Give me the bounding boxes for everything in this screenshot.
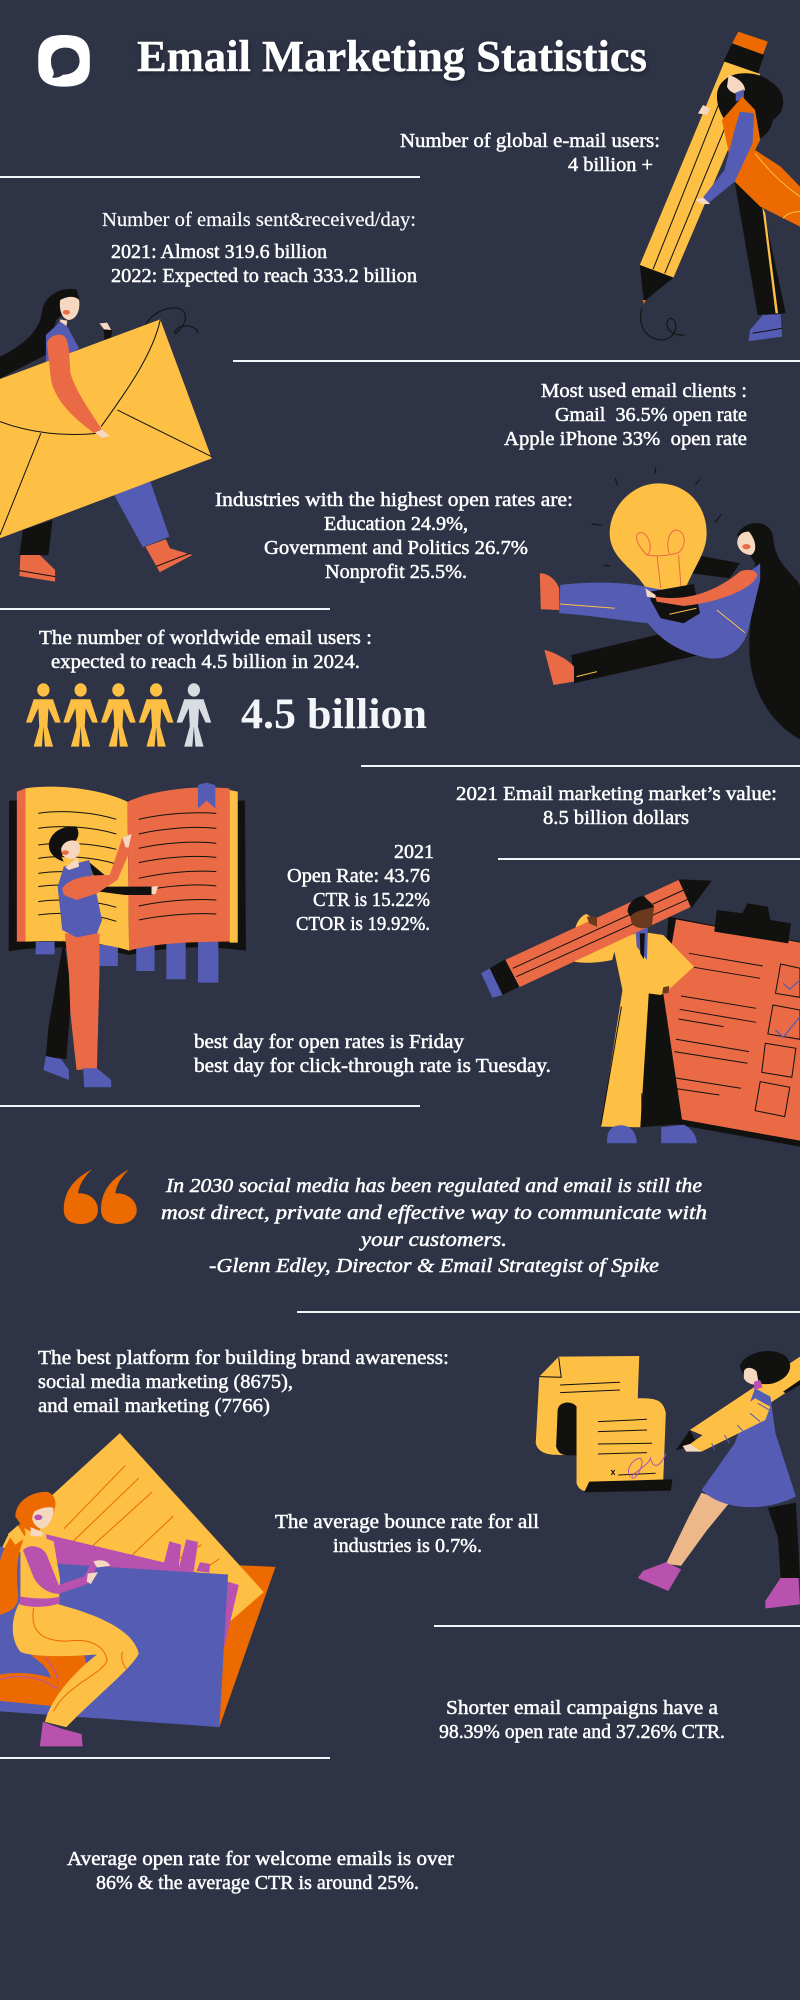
text: bounce rate: industries is 0.7%. bbox=[333, 1535, 482, 1557]
text: emails per day: 2021: Almost 319.6 billion bbox=[111, 241, 327, 263]
text: bounce rate bbox=[275, 1511, 539, 1557]
quote: most direct, private and effective way to communicate with bbox=[161, 1202, 707, 1224]
text: 2021 rates bbox=[287, 841, 434, 935]
text: welcome emails: 86% & the average CTR is around 25%. bbox=[96, 1872, 419, 1894]
quote bbox=[161, 1175, 707, 1277]
text: bounce rate: The average bounce rate for all bbox=[275, 1511, 539, 1533]
text: market value bbox=[456, 783, 777, 829]
text: industries open rates: Nonprofit 25.5%. bbox=[325, 561, 467, 583]
text: 2021 rates: CTR is 15.22% bbox=[313, 889, 430, 911]
illustration: woman holding light bulb bbox=[540, 468, 800, 739]
text: industries open rates bbox=[215, 489, 573, 583]
text: email clients: Most used email clients : bbox=[541, 380, 747, 402]
text: worldwide users: The number of worldwide email users : bbox=[39, 627, 372, 649]
text: market value: 2021 Email marketing market’s value: bbox=[456, 783, 777, 805]
text: industries open rates: Industries with the highest open rates are: bbox=[215, 489, 573, 511]
illustration: woman with folder and charts bbox=[0, 1433, 276, 1746]
text: shorter campaigns: Shorter email campaigns have a bbox=[446, 1697, 718, 1719]
text: best days bbox=[194, 1031, 551, 1077]
text: email clients: Apple iPhone 33% open rate bbox=[504, 428, 747, 450]
text: brand awareness: and email marketing (7766) bbox=[38, 1395, 270, 1417]
quote: your customers. bbox=[359, 1229, 507, 1251]
quote: -Glenn Edley, Director & Email Strategist of Spike bbox=[209, 1255, 659, 1277]
text: best days: best day for click-through rate is Tuesday. bbox=[194, 1055, 551, 1077]
illustration: woman with giant envelope bbox=[0, 289, 212, 582]
icon row: people pictogram, 4.5 of 5 bbox=[26, 683, 211, 747]
text: emails per day bbox=[102, 209, 417, 287]
illustration: woman reading giant book bbox=[9, 783, 246, 1087]
text: emails per day: 2022: Expected to reach 333.2 billion bbox=[111, 265, 417, 287]
text: market value: 8.5 billion dollars bbox=[543, 807, 689, 829]
text: worldwide users: expected to reach 4.5 billion in 2024. bbox=[51, 651, 360, 673]
text: best days: best day for open rates is Friday bbox=[194, 1031, 464, 1053]
text: shorter campaigns bbox=[439, 1697, 725, 1743]
icon: logo bbox=[38, 35, 90, 87]
text: email clients: Gmail 36.5% open rate bbox=[555, 404, 747, 426]
text: 2021 rates: 2021 bbox=[394, 841, 434, 863]
text: welcome emails: Average open rate for welcome emails is over bbox=[67, 1848, 454, 1870]
big number: 4.5 billion bbox=[241, 691, 427, 738]
text: industries open rates: Government and Politics 26.7% bbox=[264, 537, 528, 559]
text: welcome emails bbox=[67, 1848, 454, 1894]
illustration: woman with giant pencil bbox=[640, 32, 800, 341]
text: brand awareness: The best platform for building brand awareness: bbox=[38, 1347, 449, 1369]
text: industries open rates: Education 24.9%, bbox=[324, 513, 468, 535]
text: 2021 rates: CTOR is 19.92%. bbox=[296, 913, 430, 935]
icon: orange quotation marks bbox=[64, 1169, 137, 1224]
text: emails per day: Number of emails sent&received/day: bbox=[102, 209, 416, 231]
text: brand awareness bbox=[38, 1347, 449, 1417]
text: global users: 4 billion + bbox=[568, 154, 653, 176]
text: email clients bbox=[504, 380, 747, 450]
text: worldwide users bbox=[39, 627, 372, 673]
title: Email Marketing Statistics bbox=[137, 32, 647, 81]
text: global users bbox=[400, 130, 660, 176]
text: 2021 rates: Open Rate: 43.76 bbox=[287, 865, 430, 887]
illustration: woman signing scroll bbox=[536, 1351, 800, 1609]
quote: In 2030 social media has been regulated and email is still the bbox=[165, 1175, 702, 1197]
text: shorter campaigns: 98.39% open rate and 37.26% CTR. bbox=[439, 1721, 725, 1743]
illustration: man with pencil and clipboard bbox=[481, 879, 800, 1147]
text: brand awareness: social media marketing (8675), bbox=[38, 1371, 293, 1393]
text: global users: Number of global e-mail users: bbox=[400, 130, 660, 152]
